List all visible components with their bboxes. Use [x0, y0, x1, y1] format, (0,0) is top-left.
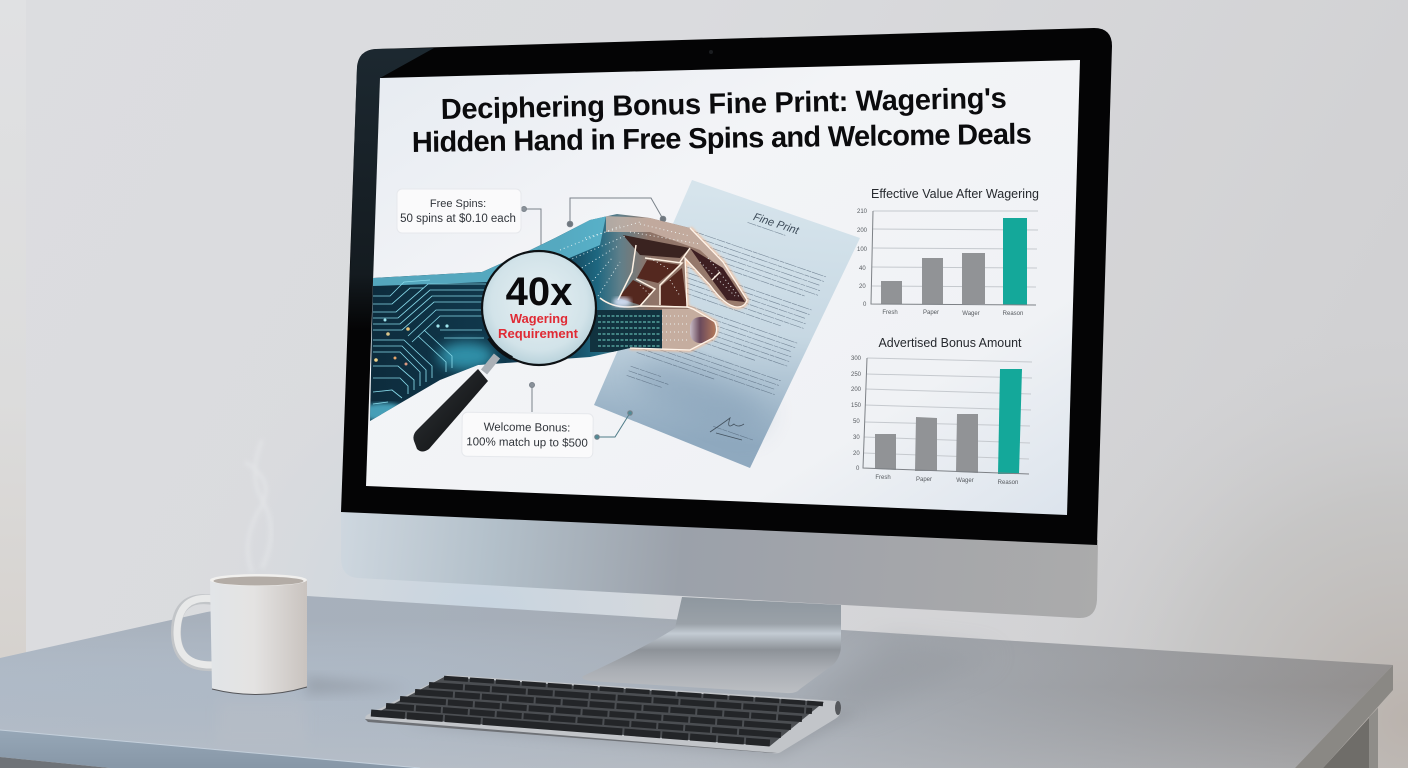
axis labels: 200: [851, 387, 862, 393]
monitor shadow on desk: [590, 640, 1000, 715]
left wall edge: [0, 0, 26, 660]
callout: welcome bonus: Welcome Bonus:: [484, 421, 570, 435]
keyboard body: [365, 675, 841, 753]
axis labels: Reason: [998, 480, 1018, 486]
chart: effective value after wagering: [857, 186, 1039, 317]
bars: [875, 414, 978, 473]
palm glowing lines: [600, 245, 720, 307]
chart title: Advertised Bonus Amount: [878, 335, 1022, 350]
chart: advertised bonus amount: [851, 335, 1032, 486]
chart title: Effective Value After Wagering: [871, 186, 1039, 201]
axis labels: [857, 209, 1023, 317]
lens label: Wagering: [510, 311, 568, 326]
axis labels: 210: [857, 209, 868, 215]
circuit nodes: [374, 318, 449, 366]
lens label: Requirement: [498, 326, 579, 341]
axis labels: 300: [851, 356, 862, 362]
axis labels: 20: [853, 451, 860, 457]
axis labels: 200: [857, 228, 868, 234]
digital hand: [370, 214, 750, 421]
callout connectors: [522, 198, 666, 439]
lens: [482, 251, 596, 365]
keyboard shadow: [400, 700, 860, 757]
bezel glare: [348, 48, 434, 330]
lens rim thick arc: [489, 338, 512, 358]
lens label: [498, 311, 579, 341]
axis labels: 100: [857, 247, 868, 253]
axis labels: Paper: [916, 477, 932, 483]
mug rim: [210, 574, 307, 586]
keyboard end roll: [835, 701, 841, 715]
desk surface: [0, 596, 1393, 768]
cyan glow patches: [438, 342, 494, 370]
callout: welcome bonus: 100% match up to $500: [466, 436, 588, 450]
axis labels: 20: [859, 284, 866, 290]
fine print document: [594, 180, 860, 468]
thumb skin: [662, 309, 715, 350]
axis labels: 40: [859, 266, 866, 272]
keyboard: [365, 675, 860, 757]
callout: welcome bonus: [462, 412, 593, 458]
hand edge lines: [630, 228, 747, 350]
keyboard front lip: [365, 719, 777, 753]
axis labels: Fresh: [875, 475, 891, 481]
title: [412, 83, 1032, 159]
signature: [710, 418, 744, 440]
axis labels: 50: [853, 419, 860, 425]
lens value: 40x: [506, 270, 572, 314]
gridlines: [864, 358, 1032, 459]
bars: [881, 253, 985, 304]
axis labels: 150: [851, 403, 862, 409]
callout: free spins: 50 spins at $0.10 each: [400, 213, 516, 225]
axes: [863, 358, 1029, 474]
axis labels: Fresh: [882, 310, 898, 316]
title: Hidden Hand in Free Spins and Welcome Deals: [412, 119, 1032, 159]
callout: free spins: [397, 189, 521, 233]
magnifying glass: [413, 251, 596, 452]
document shading: [625, 345, 775, 445]
thumb traces: [598, 316, 660, 346]
hand outer glow: [630, 228, 747, 350]
monitor bezel: [341, 28, 1112, 545]
axes: [871, 211, 1036, 305]
webcam: [709, 50, 713, 54]
monitor: [341, 28, 1112, 618]
gridlines: [872, 211, 1038, 287]
coffee mug: [176, 574, 410, 745]
desk front face: [0, 730, 420, 768]
palm light flare: [613, 297, 631, 307]
axis labels: 30: [853, 435, 860, 441]
circuit traces: [373, 280, 486, 404]
mug handle: [176, 599, 213, 666]
axis labels: [851, 356, 1018, 486]
thumb circuit base: [590, 310, 662, 352]
palm dark panels: [618, 235, 745, 307]
axis labels: Paper: [923, 310, 939, 316]
desk: [0, 596, 1393, 768]
highlighted bar: [998, 369, 1022, 474]
title: Deciphering Bonus Fine Print: Wagering's: [441, 83, 1007, 126]
mug reflection: [218, 700, 306, 745]
mug body: [210, 580, 307, 695]
axis labels: 0: [863, 302, 867, 308]
axis labels: Wager: [962, 311, 980, 317]
axis labels: 0: [856, 466, 860, 472]
document heading: Fine Print: [752, 211, 801, 237]
keyboard keys: [371, 678, 823, 743]
highlighted bar: [1003, 218, 1027, 305]
thumbnail: [690, 317, 715, 343]
mug shadow: [306, 676, 410, 695]
callout: free spins: Free Spins:: [430, 198, 486, 210]
screen: [366, 60, 1080, 515]
skin dots: [560, 222, 740, 340]
axis labels: 250: [851, 372, 862, 378]
desk right edge and leg: [1295, 665, 1393, 768]
monitor chin: [341, 505, 1098, 618]
steam: [245, 440, 271, 572]
axis labels: Reason: [1003, 311, 1023, 317]
keyboard key bed: [371, 677, 824, 746]
handle: [413, 369, 488, 452]
cyan back of hand: [373, 216, 606, 286]
monitor stand: [582, 597, 841, 693]
document text lines: [619, 206, 836, 441]
axis labels: Wager: [956, 478, 974, 484]
pale skin top edge: [606, 216, 735, 282]
collar: [484, 356, 497, 372]
